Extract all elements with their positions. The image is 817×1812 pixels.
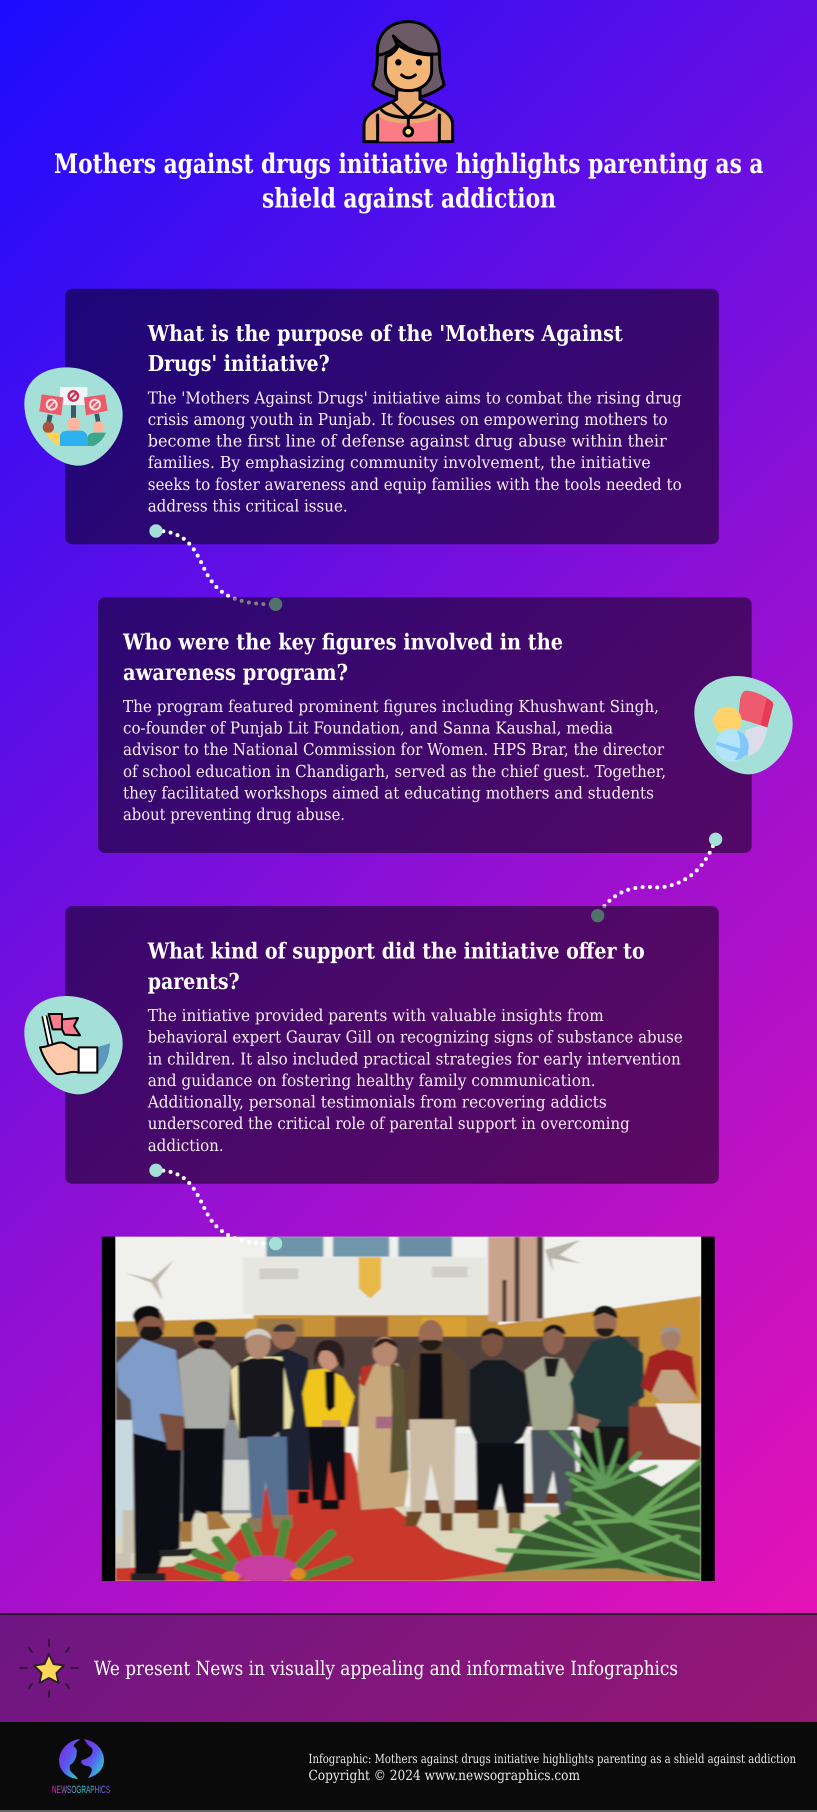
person 10 check shirt: [568, 1334, 646, 1428]
text block: card three: Additionally, personal testimonials from recovering addicts: [147, 1093, 607, 1112]
text block: card three: The initiative provided parents with valuable insights from: [148, 1006, 604, 1025]
title: shield against addiction: [262, 184, 556, 215]
person 6 saree: [357, 1363, 408, 1510]
icon: star: [20, 1640, 78, 1697]
person 5 yellow jacket: [302, 1368, 355, 1427]
panel: key figures: [98, 597, 752, 853]
heading: card two: Who were the key figures involved in the: [122, 629, 563, 655]
text block: card three: underscored the critical role of parental support in overcoming: [148, 1114, 630, 1133]
text block: card two: co-founder of Punjab Lit Foundation, and Sanna Kaushal, media: [123, 719, 613, 738]
heading: card one: What is the purpose of the 'Mothers Against: [147, 321, 623, 347]
arrow: dotted connector three: [149, 1164, 282, 1250]
panel: footer: [0, 1722, 817, 1812]
icon: woman avatar: [364, 22, 453, 142]
text: tagline: We present News in visually appealing and informative Infographics: [94, 1657, 678, 1680]
panel: support for parents: [65, 906, 719, 1184]
plant: [498, 1460, 701, 1581]
flowers: [180, 1523, 347, 1581]
text block: card one: crisis among youth in Punjab. It focuses on empowering mothers to: [148, 410, 668, 429]
panel: tagline band: [0, 1613, 817, 1722]
person 11 seated woman: [641, 1348, 697, 1397]
text block: card two: of school education in Chandigarh, served as the chief guest. Together,: [123, 762, 666, 781]
person 9 olive jacket: [525, 1357, 574, 1433]
person 8 black shirt: [470, 1360, 530, 1447]
text block: card three: and guidance on fostering healthy family communication.: [148, 1071, 596, 1090]
person 2: [178, 1348, 231, 1433]
text block: card two: The program featured prominent figures including Khushwant Singh,: [123, 697, 659, 716]
title: [54, 149, 764, 215]
text block: card three: addiction.: [148, 1136, 224, 1155]
text block: card one: [148, 388, 682, 516]
text: footer credits: Copyright © 2024 www.newsographics.com: [308, 1768, 580, 1784]
heading: card one: Drugs' initiative?: [148, 351, 330, 377]
text block: card two: [123, 697, 666, 824]
person 4 behind: [270, 1348, 310, 1490]
panel: purpose of the initiative: [65, 289, 719, 544]
text block: card one: The 'Mothers Against Drugs' initiative aims to combat the rising drug: [148, 388, 682, 407]
heading: card two: [122, 629, 563, 686]
heading: card three: What kind of support did the initiative offer to: [147, 938, 645, 964]
icon: protest signs: [24, 367, 123, 466]
icon: hand holding flag: [24, 996, 123, 1094]
person 1: [117, 1338, 188, 1447]
icon: pills: [694, 676, 793, 774]
text block: card one: become the first line of defense against drug abuse within their: [148, 432, 667, 451]
text block: card one: address this critical issue.: [148, 496, 348, 516]
heading: card three: parents?: [148, 969, 240, 995]
text block: card two: they facilitated workshops aimed at educating mothers and students: [123, 783, 654, 802]
text block: card two: advisor to the National Commission for Women. HPS Brar, the director: [123, 740, 664, 759]
heading: card one: [147, 321, 623, 377]
heading: card three: [147, 938, 645, 995]
photo: group of attendees: [102, 1233, 715, 1587]
arrow: dotted connector one: [149, 524, 282, 611]
text block: card three: in children. It also included practical strategies for early intervention: [148, 1049, 681, 1068]
text block: card three: [147, 1006, 683, 1155]
person 3: [231, 1357, 293, 1433]
text block: card two: about preventing drug abuse.: [123, 805, 345, 824]
icon: Newsographics logo: NEWSOGRAPHICS: [52, 1784, 110, 1796]
text: footer credits: [308, 1751, 796, 1784]
text block: card one: families. By emphasizing community involvement, the initiative: [148, 453, 651, 472]
heading: card two: awareness program?: [123, 660, 348, 686]
person 7 brown blazer: [404, 1348, 468, 1432]
text block: card one: seeks to foster awareness and equip families with the tools needed to: [148, 475, 682, 494]
text block: card three: behavioral expert Gaurav Gill on recognizing signs of substance abuse: [148, 1028, 683, 1047]
icon: Newsographics logo: [52, 1739, 110, 1796]
arrow: dotted connector two: [591, 833, 722, 922]
